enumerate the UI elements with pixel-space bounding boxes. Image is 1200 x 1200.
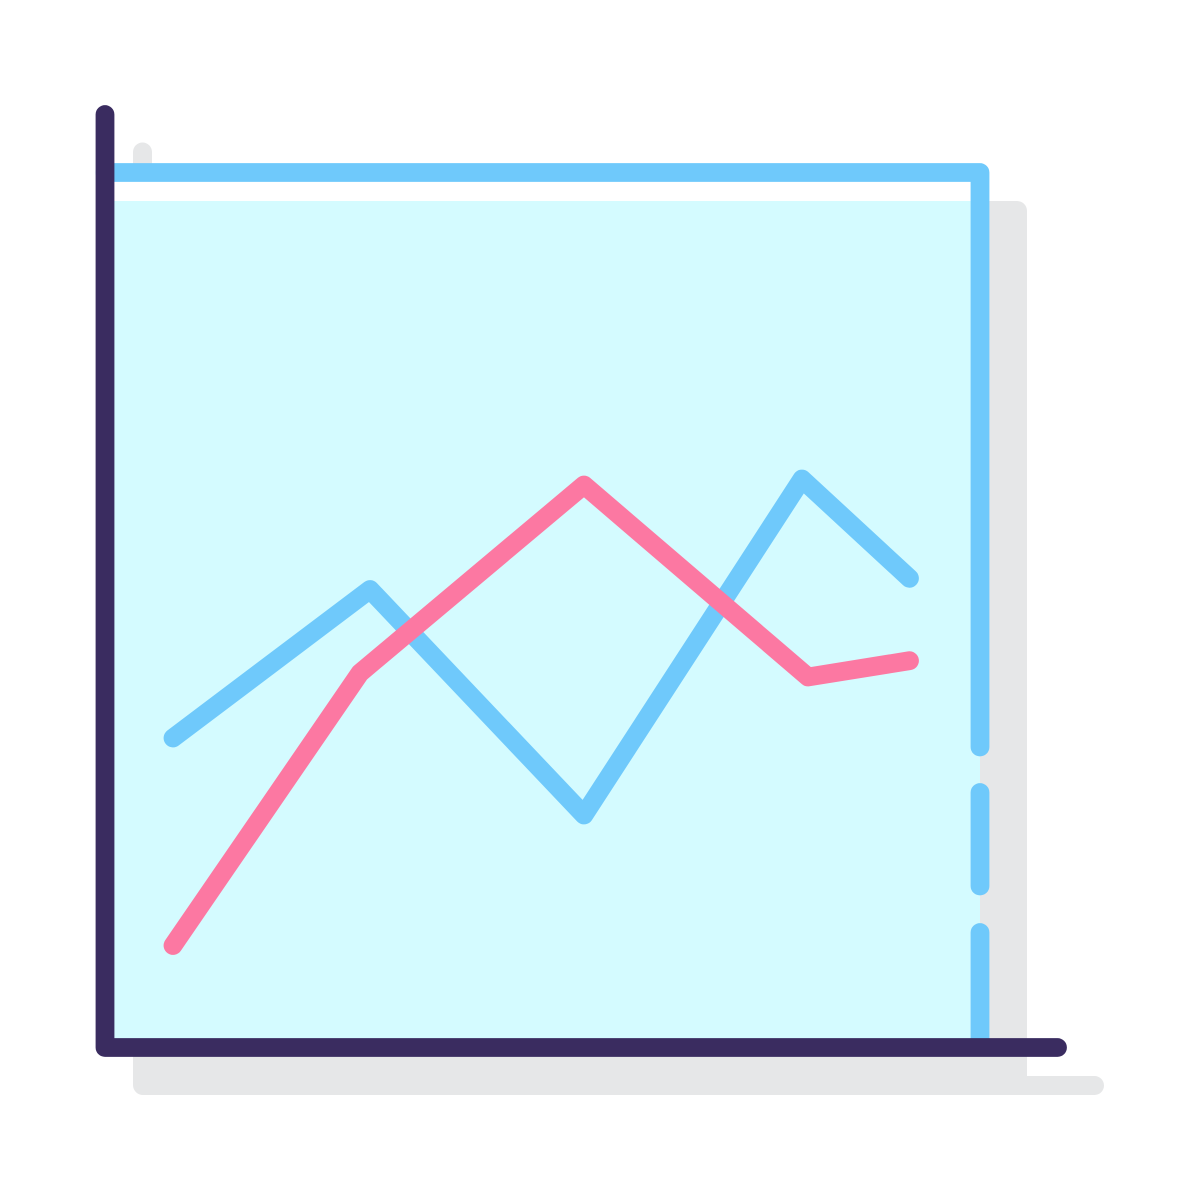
chart panel background xyxy=(105,201,980,1047)
chart panel top band xyxy=(105,173,980,201)
drop shadow xyxy=(133,142,1104,1095)
blue data line xyxy=(173,479,910,815)
chart frame: top and right border xyxy=(105,172,980,1047)
pink data line xyxy=(173,485,910,946)
axes xyxy=(105,114,1058,1048)
